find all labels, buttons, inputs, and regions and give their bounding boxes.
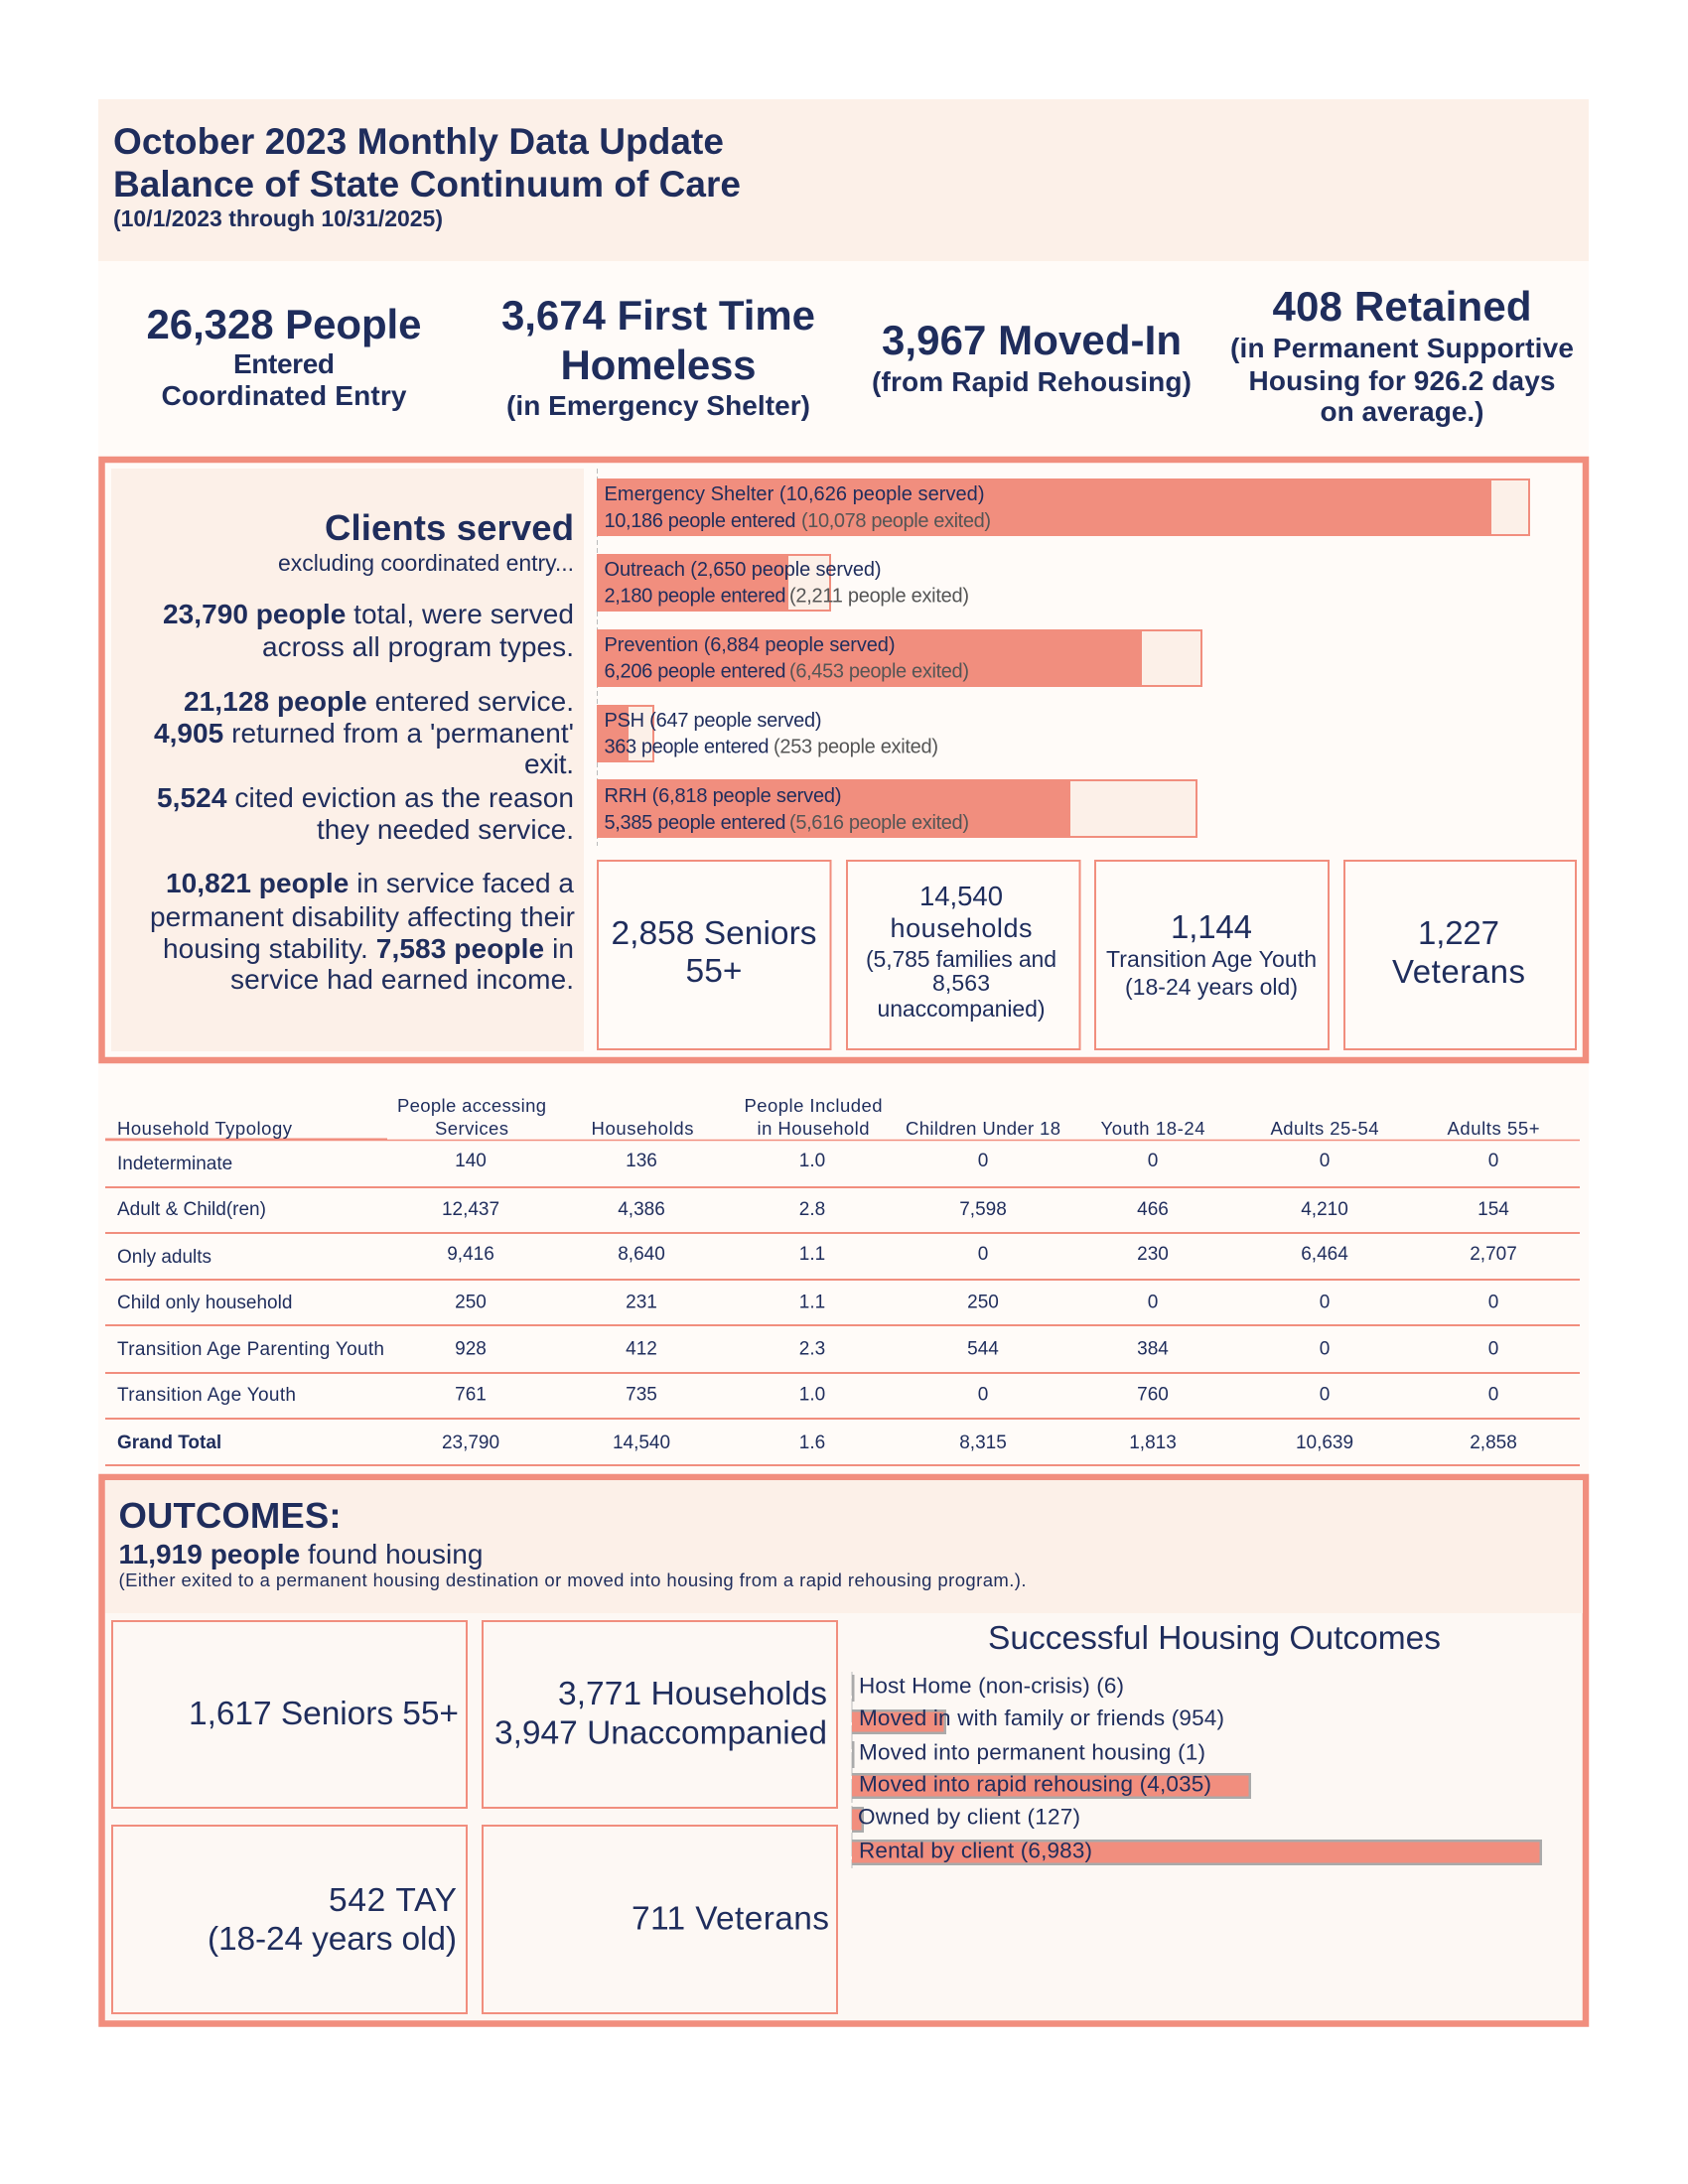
bar: outreach [597, 554, 969, 612]
stat: moved in: (from Rapid Rehousing) [872, 366, 1192, 397]
row: transition age parenting youth: 928 [455, 1338, 487, 1360]
row: only adults: 9,416 [447, 1244, 494, 1265]
card: veterans: Veterans [1392, 953, 1525, 990]
row: transition age parenting youth: 412 [626, 1338, 657, 1360]
stat: people entered: Coordinated Entry [161, 380, 407, 411]
stat: people entered: 26,328 People [147, 301, 421, 347]
text: disability and income: permanent disability affecting their [150, 901, 575, 932]
stat: first time homeless: (in Emergency Shelter) [506, 390, 810, 421]
bar: moved into permanent housing: Moved into permanent housing (1) [859, 1739, 1205, 1765]
table header row: Youth 18-24 [1100, 1118, 1205, 1139]
text: entered service [154, 686, 574, 779]
row: only adults: 8,640 [618, 1244, 665, 1265]
bar: RRH: (5,616 people exited) [789, 812, 969, 834]
row: adult and children: 4,386 [618, 1199, 665, 1220]
card: seniors housed: 1,617 Seniors 55+ [189, 1696, 459, 1732]
card: seniors: 55+ [685, 953, 743, 990]
bar: outreach: Outreach (2,650 people served) [604, 559, 882, 581]
table header row: People accessing [397, 1095, 546, 1116]
row: grand total: 10,639 [1296, 1433, 1353, 1453]
bar chart: program types [597, 469, 1530, 846]
bar: emergency shelter: (10,078 people exited) [801, 510, 991, 532]
table header row [117, 1095, 1539, 1139]
stat: first time homeless [501, 292, 815, 421]
row: adult and children: 12,437 [442, 1199, 499, 1220]
bar: rental by client [852, 1839, 1542, 1865]
card: transition age youth: 1,144 [1171, 908, 1252, 945]
card: households: 14,540 [919, 881, 1003, 911]
chart: successful housing outcomes [852, 1620, 1542, 1868]
table header row: Services [435, 1118, 508, 1139]
row: transition age parenting youth: Transition Age Parenting Youth [117, 1339, 384, 1360]
bar: outreach: (2,211 people exited) [789, 586, 969, 608]
text: disability and income: service had earned income. [230, 964, 574, 995]
row: transition age youth: 735 [626, 1384, 657, 1406]
text: eviction [157, 782, 574, 845]
card: TAY housed [112, 1826, 467, 2013]
panel: outcomes [101, 1477, 1586, 2023]
card: TAY housed: (18-24 years old) [208, 1921, 457, 1958]
stat: moved in [872, 317, 1192, 397]
row: only adults: 1.1 [799, 1244, 825, 1265]
row: child only household: 0 [1488, 1293, 1498, 1312]
row: adult and children: 4,210 [1301, 1199, 1348, 1220]
card: households [847, 861, 1080, 1049]
text: found housing: 11,919 people found housing [119, 1539, 483, 1570]
card: households housed: 3,947 Unaccompanied [494, 1715, 827, 1751]
row: child only household: 0 [1148, 1293, 1158, 1312]
date range: (10/1/2023 through 10/31/2025) [113, 205, 443, 231]
card: veterans: 1,227 [1418, 914, 1499, 951]
row: transition age youth: 0 [1320, 1384, 1330, 1406]
row: child only household: 250 [967, 1293, 999, 1312]
row: grand total [117, 1433, 1517, 1453]
outcomes header [105, 1480, 1583, 1613]
row: adult and children: Adult & Child(ren) [117, 1199, 266, 1220]
text: eviction: they needed service. [317, 814, 574, 845]
stat: retained [1230, 283, 1574, 427]
card: transition age youth [1095, 861, 1329, 1049]
row: child only household: 250 [455, 1293, 487, 1312]
text: entered service: 4,905 returned from a 'permanent' [154, 718, 574, 749]
row: grand total: Grand Total [117, 1433, 221, 1453]
row: transition age youth: 1.0 [799, 1384, 825, 1406]
chart title: Successful Housing Outcomes [988, 1620, 1441, 1657]
row: only adults: 0 [978, 1244, 988, 1265]
table header row: in Household [757, 1118, 870, 1139]
row: grand total: 23,790 [442, 1433, 499, 1453]
stat: people entered [147, 301, 421, 411]
row: indeterminate: 0 [978, 1151, 988, 1171]
row: grand total: 8,315 [959, 1433, 1007, 1453]
text: disability and income [150, 868, 575, 995]
card: veterans housed [483, 1826, 837, 2013]
table header row: Adults 25-54 [1271, 1118, 1378, 1139]
subtitle: Balance of State Continuum of Care [113, 164, 741, 205]
text: entered service: exit. [524, 749, 574, 779]
key statistics row [147, 283, 1574, 427]
row: child only household: 1.1 [799, 1293, 825, 1312]
card: veterans housed: 711 Veterans [632, 1900, 829, 1938]
row: indeterminate: 0 [1320, 1151, 1330, 1171]
text: people served: 23,790 people total, were served [163, 599, 574, 629]
bar: prevention: Prevention (6,884 people served) [604, 634, 896, 656]
bar: outreach: 2,180 people entered [604, 586, 786, 608]
text: disability and income: housing stability. 7,583 people in [163, 933, 574, 964]
bar: PSH [597, 705, 938, 762]
bar: prevention: (6,453 people exited) [789, 661, 969, 683]
bar: RRH: RRH (6,818 people served) [604, 785, 842, 807]
row: transition age youth [117, 1384, 1498, 1406]
row: only adults [117, 1244, 1517, 1268]
row: only adults: 2,707 [1470, 1244, 1517, 1265]
row: child only household: 0 [1320, 1293, 1330, 1312]
card: seniors housed [112, 1621, 467, 1808]
card: veterans [1344, 861, 1576, 1049]
row: grand total: 1,813 [1129, 1433, 1177, 1453]
bar: PSH: PSH (647 people served) [604, 710, 822, 732]
table: household typology [105, 1095, 1580, 1465]
row: indeterminate: 0 [1488, 1151, 1498, 1171]
row: indeterminate: 140 [455, 1151, 487, 1171]
text: people served: across all program types. [262, 631, 574, 662]
row: grand total: 1.6 [799, 1433, 825, 1453]
heading: clients served: Clients served [325, 507, 574, 548]
row: grand total: 2,858 [1470, 1433, 1517, 1453]
table header row: Children Under 18 [906, 1118, 1060, 1139]
table header row: People Included [745, 1095, 882, 1116]
card: households: unaccompanied) [878, 996, 1045, 1022]
stat: first time homeless: 3,674 First Time [501, 292, 815, 339]
stat: retained: (in Permanent Supportive [1230, 333, 1574, 363]
bar: moved in with family or friends: Moved in with family or friends (954) [859, 1706, 1224, 1730]
card: seniors: 2,858 Seniors [612, 915, 816, 952]
row: transition age youth: 760 [1137, 1384, 1169, 1406]
text: eviction: 5,524 cited eviction as the reason [157, 782, 574, 813]
row: transition age parenting youth: 384 [1137, 1338, 1169, 1360]
text: people served [163, 599, 574, 662]
row: transition age parenting youth: 0 [1320, 1338, 1330, 1360]
row: adult and children: 7,598 [959, 1199, 1007, 1220]
stat: retained: on average.) [1321, 396, 1483, 427]
stat: retained: Housing for 926.2 days [1249, 365, 1555, 396]
row: indeterminate: 136 [626, 1151, 657, 1171]
row: indeterminate [117, 1151, 1498, 1174]
row: adult and children: 2.8 [799, 1199, 825, 1220]
bar: PSH: 363 people entered [604, 737, 769, 758]
card: transition age youth: Transition Age Youth [1106, 946, 1317, 972]
bar: rental by client: Rental by client (6,983) [859, 1839, 1092, 1862]
row: indeterminate: 0 [1148, 1151, 1158, 1171]
bar: PSH: (253 people exited) [774, 737, 938, 758]
row: grand total: 14,540 [613, 1433, 670, 1453]
bar: emergency shelter [597, 478, 1530, 536]
text: disability and income: 10,821 people in service faced a [166, 868, 574, 898]
bar: RRH [597, 779, 1197, 838]
bar: prevention [597, 629, 1202, 687]
bar: moved into rapid rehousing: Moved into rapid rehousing (4,035) [859, 1771, 1211, 1797]
text: entered service: 21,128 people entered service. [184, 686, 574, 717]
row: transition age youth: 0 [1488, 1384, 1498, 1406]
card: seniors [598, 861, 830, 1049]
bar: emergency shelter: Emergency Shelter (10,626 people served) [604, 483, 985, 505]
table header row: Adults 55+ [1448, 1118, 1539, 1139]
bar: emergency shelter: 10,186 people entered [604, 510, 796, 532]
panel: clients served [101, 460, 1586, 1060]
row: adult and children: 466 [1137, 1199, 1169, 1220]
row: adult and children: 154 [1477, 1199, 1509, 1220]
bar: owned by client: Owned by client (127) [858, 1805, 1080, 1829]
row: transition age youth: 761 [455, 1384, 487, 1406]
card: households: (5,785 families and [866, 946, 1056, 972]
note: definition: (Either exited to a permanent housing destination or moved into housing from a rapid rehousing program.). [119, 1570, 1027, 1590]
row: only adults: Only adults [117, 1247, 211, 1268]
stat: first time homeless: Homeless [560, 341, 757, 388]
row: child only household: 231 [626, 1293, 657, 1312]
card: households: 8,563 [932, 970, 990, 996]
row: indeterminate: Indeterminate [117, 1154, 232, 1174]
row: transition age parenting youth [117, 1338, 1498, 1360]
bar: RRH: 5,385 people entered [604, 812, 786, 834]
row: indeterminate: 1.0 [799, 1151, 825, 1171]
row: transition age parenting youth: 0 [1488, 1338, 1498, 1360]
card: households housed [483, 1621, 837, 1808]
row: child only household: Child only household [117, 1293, 292, 1313]
row: only adults: 6,464 [1301, 1244, 1348, 1265]
row: transition age parenting youth: 544 [967, 1338, 999, 1360]
card: TAY housed: 542 TAY [329, 1882, 457, 1919]
stat: retained: 408 Retained [1273, 283, 1531, 330]
title header panel [98, 99, 1589, 261]
row: adult and children [117, 1199, 1509, 1220]
bar: host home: Host Home (non-crisis) (6) [859, 1674, 1124, 1698]
note: excluding coordinated entry: excluding coordinated entry... [278, 550, 574, 576]
clients served text panel [111, 469, 584, 1051]
row: transition age youth: 0 [978, 1384, 988, 1406]
bar: prevention: 6,206 people entered [604, 661, 786, 683]
heading: outcomes: OUTCOMES: [119, 1495, 342, 1536]
card: households: households [890, 913, 1033, 943]
row: transition age parenting youth: 2.3 [799, 1338, 825, 1360]
row: child only household [117, 1293, 1498, 1313]
row: only adults: 230 [1137, 1244, 1169, 1265]
table header row: Households [592, 1118, 693, 1139]
card: transition age youth: (18-24 years old) [1125, 974, 1298, 1000]
stat: people entered: Entered [233, 348, 335, 379]
stat: moved in: 3,967 Moved-In [882, 317, 1182, 363]
title: October 2023 Monthly Data Update [113, 121, 724, 162]
row: transition age youth: Transition Age Youth [117, 1385, 296, 1406]
table header row: Household Typology [117, 1118, 293, 1139]
card: households housed: 3,771 Households [558, 1676, 827, 1712]
